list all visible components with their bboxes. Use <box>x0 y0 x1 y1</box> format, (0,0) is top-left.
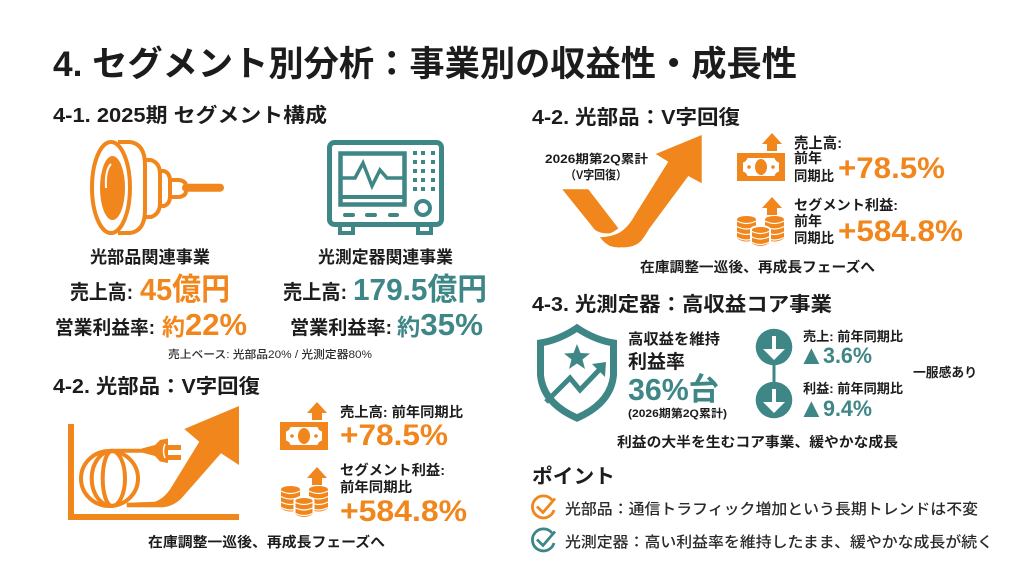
metric: segment profit yoy: +584.8% <box>838 215 963 248</box>
metric: sales yoy: +78.5% <box>838 152 945 185</box>
metric: segment profit yoy <box>794 197 963 248</box>
metric: profit decline: 利益: 前年同期比 <box>803 381 903 396</box>
metric: segment profit yoy: セグメント利益: <box>794 197 898 213</box>
metric: optical components margin: 約22% <box>162 307 247 342</box>
metric: optical components sales: 45億円 <box>140 272 230 307</box>
icon: measuring instrument <box>330 142 442 233</box>
metric: sales decline <box>798 329 903 370</box>
caption: left 4-2: 在庫調整一巡後、再成長フェーズへ <box>148 534 385 550</box>
label: optical components: 光部品関連事業 <box>90 248 210 267</box>
metric: sales decline: ▲ <box>798 340 825 370</box>
metric: profit decline: 9.4% <box>823 396 872 421</box>
label: cumulative period: （V字回復） <box>565 167 627 182</box>
icon: money with up arrow <box>280 402 328 450</box>
metric: instruments margin <box>290 307 483 342</box>
metric: sales yoy <box>340 404 463 452</box>
heading: points: ポイント <box>532 465 615 488</box>
metric: segment profit yoy: 同期比 <box>794 230 834 246</box>
heading: 4-1: 4-1. 2025期 セグメント構成 <box>53 103 327 127</box>
metric: segment profit yoy: +584.8% <box>340 495 467 528</box>
metric: high profit margin: (2026期第2Q累計) <box>628 406 727 420</box>
heading: 4-2 right: 4-2. 光部品：V字回復 <box>532 106 740 129</box>
panel: 4-3 optical instruments <box>532 293 977 450</box>
metric: high profit margin: 36%台 <box>628 372 719 407</box>
icon: teal check <box>532 529 555 551</box>
metric: optical components sales <box>70 272 230 307</box>
metric: segment profit yoy: 前年 <box>794 213 822 229</box>
metric: instruments margin: 約35% <box>397 307 483 342</box>
panel: points <box>532 465 993 551</box>
metric: instruments margin: 営業利益率: <box>290 317 392 339</box>
panel: 4-2 optical components left <box>53 375 467 550</box>
metric: segment profit yoy: セグメント利益: <box>340 462 445 478</box>
icon: shield with star and rising arrow <box>540 328 614 418</box>
panel: 4-1 segment composition <box>53 103 487 361</box>
metric: sales yoy: 売上高: <box>794 135 842 152</box>
note: sales base: 売上ベース: 光部品20% / 光測定器80% <box>168 347 372 361</box>
metric: optical components margin: 営業利益率: <box>55 317 155 339</box>
metric: sales decline: 3.6% <box>823 343 872 368</box>
point: optical components: 光部品：通信トラフィック増加という長期トレンドは不変 <box>565 500 978 518</box>
icon: coins with up arrow <box>281 467 328 518</box>
title: 4. セグメント別分析：事業別の収益性・成長性 <box>53 45 797 84</box>
label: cumulative period <box>545 151 648 182</box>
icon: coins with up arrow <box>737 197 784 247</box>
icon: down arrows connected <box>756 329 792 418</box>
metric: segment profit yoy <box>340 462 467 528</box>
icon: optical lens connector <box>92 142 220 233</box>
metric: segment profit yoy: 前年同期比 <box>340 479 412 495</box>
metric: sales yoy: 売上高: 前年同期比 <box>340 404 463 420</box>
heading: 4-2 left: 4-2. 光部品：V字回復 <box>53 375 260 398</box>
metric: instruments sales: 売上高: <box>283 281 347 304</box>
label: optical measuring instruments: 光測定器関連事業 <box>318 248 453 267</box>
metric: profit decline: ▲ <box>798 393 825 423</box>
metric: optical components sales: 売上高: <box>70 281 133 304</box>
metric: sales yoy: +78.5% <box>340 419 448 452</box>
metric: instruments sales <box>283 272 487 307</box>
metric: sales yoy <box>794 135 945 185</box>
metric: high profit margin <box>628 330 727 420</box>
chart: V-shaped recovery arrow <box>545 135 702 247</box>
metric: sales decline: 売上: 前年同期比 <box>803 329 903 344</box>
note: pause: 一服感あり <box>913 365 977 380</box>
metric: high profit margin: 利益率 <box>628 351 685 373</box>
label: cumulative period: 2026期第2Q累計 <box>545 151 648 166</box>
caption: right 4-2: 在庫調整一巡後、再成長フェーズへ <box>640 259 875 275</box>
metric: high profit margin: 高収益を維持 <box>628 330 720 348</box>
icon: orange check <box>532 496 555 518</box>
panel: 4-2 optical components right <box>532 106 963 275</box>
metric: profit decline <box>798 381 903 423</box>
caption: 4-3: 利益の大半を生むコア事業、緩やかな成長 <box>617 434 898 450</box>
metric: optical components margin <box>55 307 247 342</box>
metric: sales yoy: 前年 <box>794 150 822 166</box>
icon: money with up arrow <box>737 133 785 181</box>
point: optical instruments: 光測定器：高い利益率を維持したまま、緩やかな成長が続く <box>565 533 993 551</box>
metric: sales yoy: 同期比 <box>794 168 834 184</box>
metric: instruments sales: 179.5億円 <box>353 272 487 307</box>
chart: cable coil and growth arrow <box>68 406 239 520</box>
heading: 4-3: 4-3. 光測定器：高収益コア事業 <box>532 293 832 316</box>
